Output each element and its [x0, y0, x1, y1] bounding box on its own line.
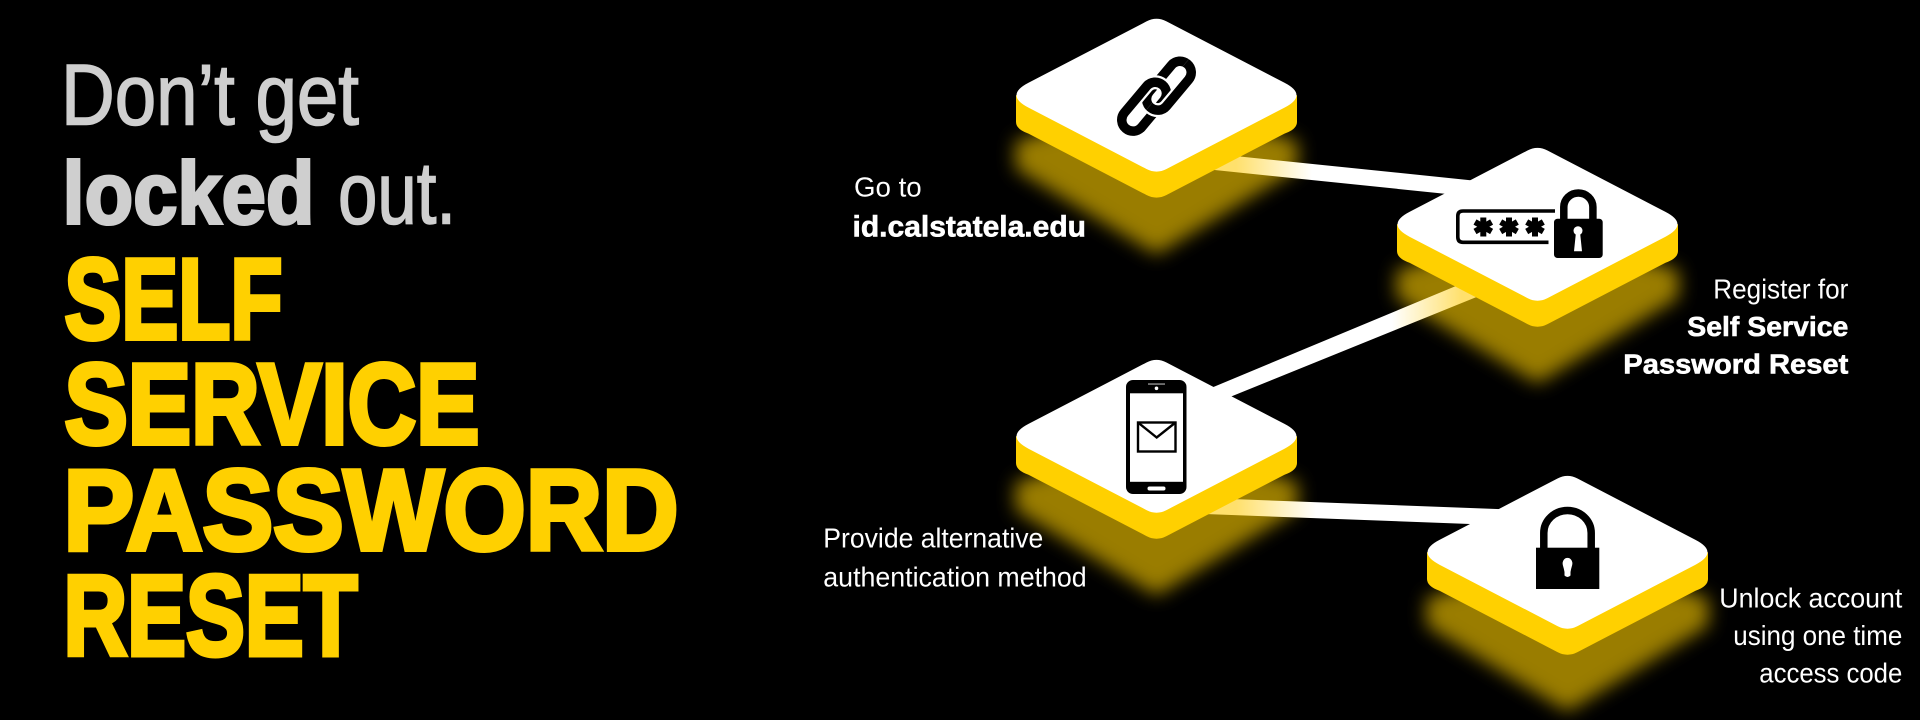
connector: step 2 to step 3	[1205, 276, 1500, 399]
icon: padlock small	[1554, 193, 1603, 258]
label: step 2: Self Service	[1687, 311, 1848, 342]
icon: phone with envelope	[1126, 380, 1186, 494]
label: step 3	[823, 522, 1087, 593]
heading line: PASSWORD: PASSWORD	[64, 448, 678, 574]
label: step 2	[1623, 273, 1848, 379]
label: step 3: authentication method	[823, 562, 1087, 593]
label: step 4	[1719, 582, 1903, 688]
heading line: Don't get: Don’t get	[61, 48, 359, 144]
label: step 4: using one time	[1733, 620, 1902, 651]
heading line: SERVICE: SERVICE	[64, 342, 480, 468]
label: step 1: id.calstatela.edu	[852, 211, 1086, 244]
label: step 3: Provide alternative	[823, 522, 1043, 553]
icon: chain link	[1117, 53, 1196, 139]
label: step 2: Password Reset	[1623, 348, 1848, 379]
title: self service password reset	[64, 236, 678, 680]
heading line: SELF: SELF	[64, 236, 282, 364]
platform: step 2 password	[1397, 148, 1678, 327]
platform: step 4 unlock	[1427, 476, 1708, 655]
connector: step 3 to step 4	[1205, 498, 1510, 526]
label: step 1: Go to	[854, 172, 922, 203]
label: step 4: access code	[1759, 657, 1902, 688]
glows under platforms	[1018, 105, 1706, 708]
connector: step 1 to step 2	[1205, 153, 1480, 197]
platform: step 3 phone	[1016, 360, 1297, 539]
heading line: locked out.: locked	[62, 144, 314, 242]
label: step 2: Register for	[1713, 273, 1848, 304]
icon: password field	[1458, 211, 1555, 242]
title: don't get locked out	[61, 48, 456, 242]
icon: padlock large	[1536, 510, 1599, 589]
heading line: locked out.: out.	[338, 144, 456, 242]
label: step 1	[852, 172, 1086, 244]
platform: step 1 link	[1016, 19, 1297, 198]
heading line: RESET: RESET	[64, 553, 358, 680]
label: step 4: Unlock account	[1719, 582, 1903, 613]
